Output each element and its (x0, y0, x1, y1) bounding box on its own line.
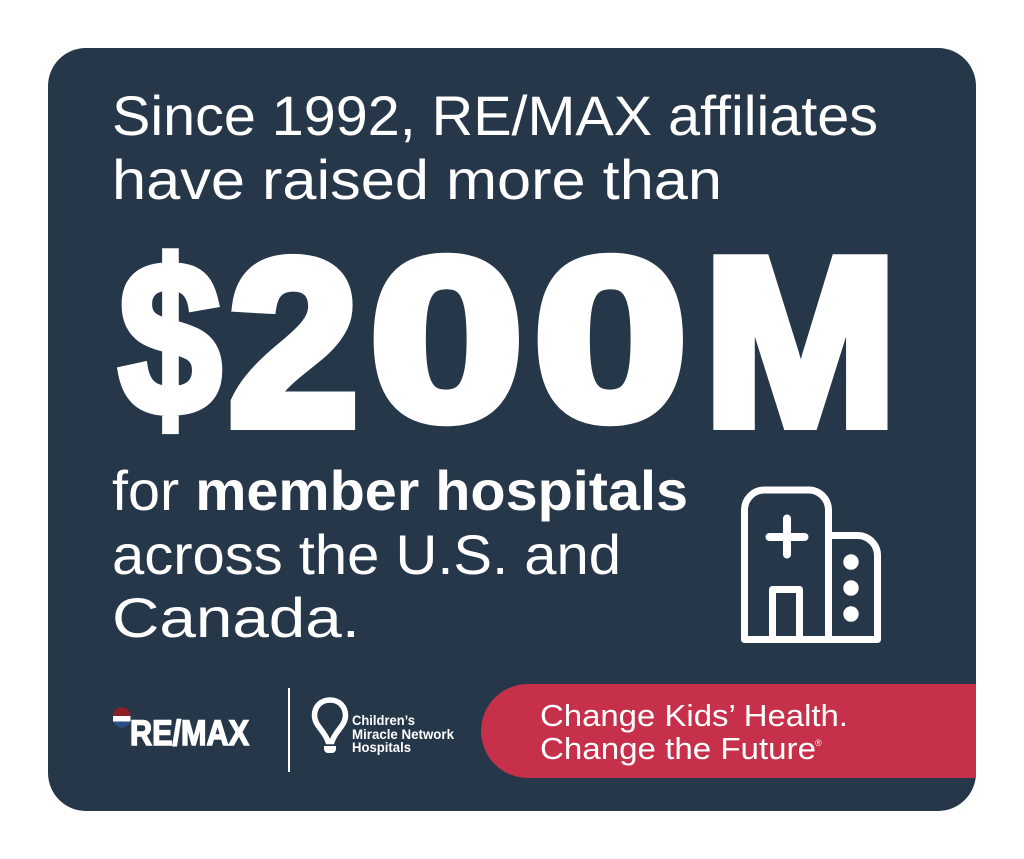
wordmark: RE/MAX: RE/MAX (130, 714, 250, 753)
text block: member hospitals (112, 459, 688, 649)
heading: intro text: Since 1992, RE/MAX affiliates (112, 84, 878, 147)
big number: $200M: 2 (228, 211, 358, 474)
tagline text: Change the Future (540, 731, 816, 766)
text block: member hospitals: Canada. (112, 586, 360, 649)
divider (288, 688, 290, 772)
wordmark: Hospitals (352, 740, 411, 755)
logo: Children's Miracle Network Hospitals (314, 700, 454, 755)
text block: member hospitals: for member hospitals (112, 459, 688, 522)
icon: RE/MAX balloon (113, 707, 130, 728)
wordmark: Miracle Network (352, 727, 454, 742)
big number: $200M: $ (118, 218, 222, 461)
big number: $200M: M (704, 210, 897, 475)
heading: intro text (112, 84, 878, 211)
big number: $200M: 0 (370, 213, 523, 467)
wordmark: Children’s (352, 713, 415, 728)
big number: $200M (118, 210, 897, 475)
icon: hospital building (744, 490, 878, 640)
tagline text: Change Kids’ Health. (540, 698, 848, 733)
heading: intro text: have raised more than (112, 148, 722, 211)
logo: RE/MAX (113, 707, 250, 753)
tagline text (540, 698, 848, 766)
icon: balloon (314, 700, 346, 753)
tagline text: ® (815, 738, 822, 748)
wordmark (352, 713, 454, 755)
callout: red tagline banner (481, 684, 976, 778)
text block: member hospitals: across the U.S. and (112, 523, 621, 586)
big number: $200M: 0 (534, 213, 687, 467)
